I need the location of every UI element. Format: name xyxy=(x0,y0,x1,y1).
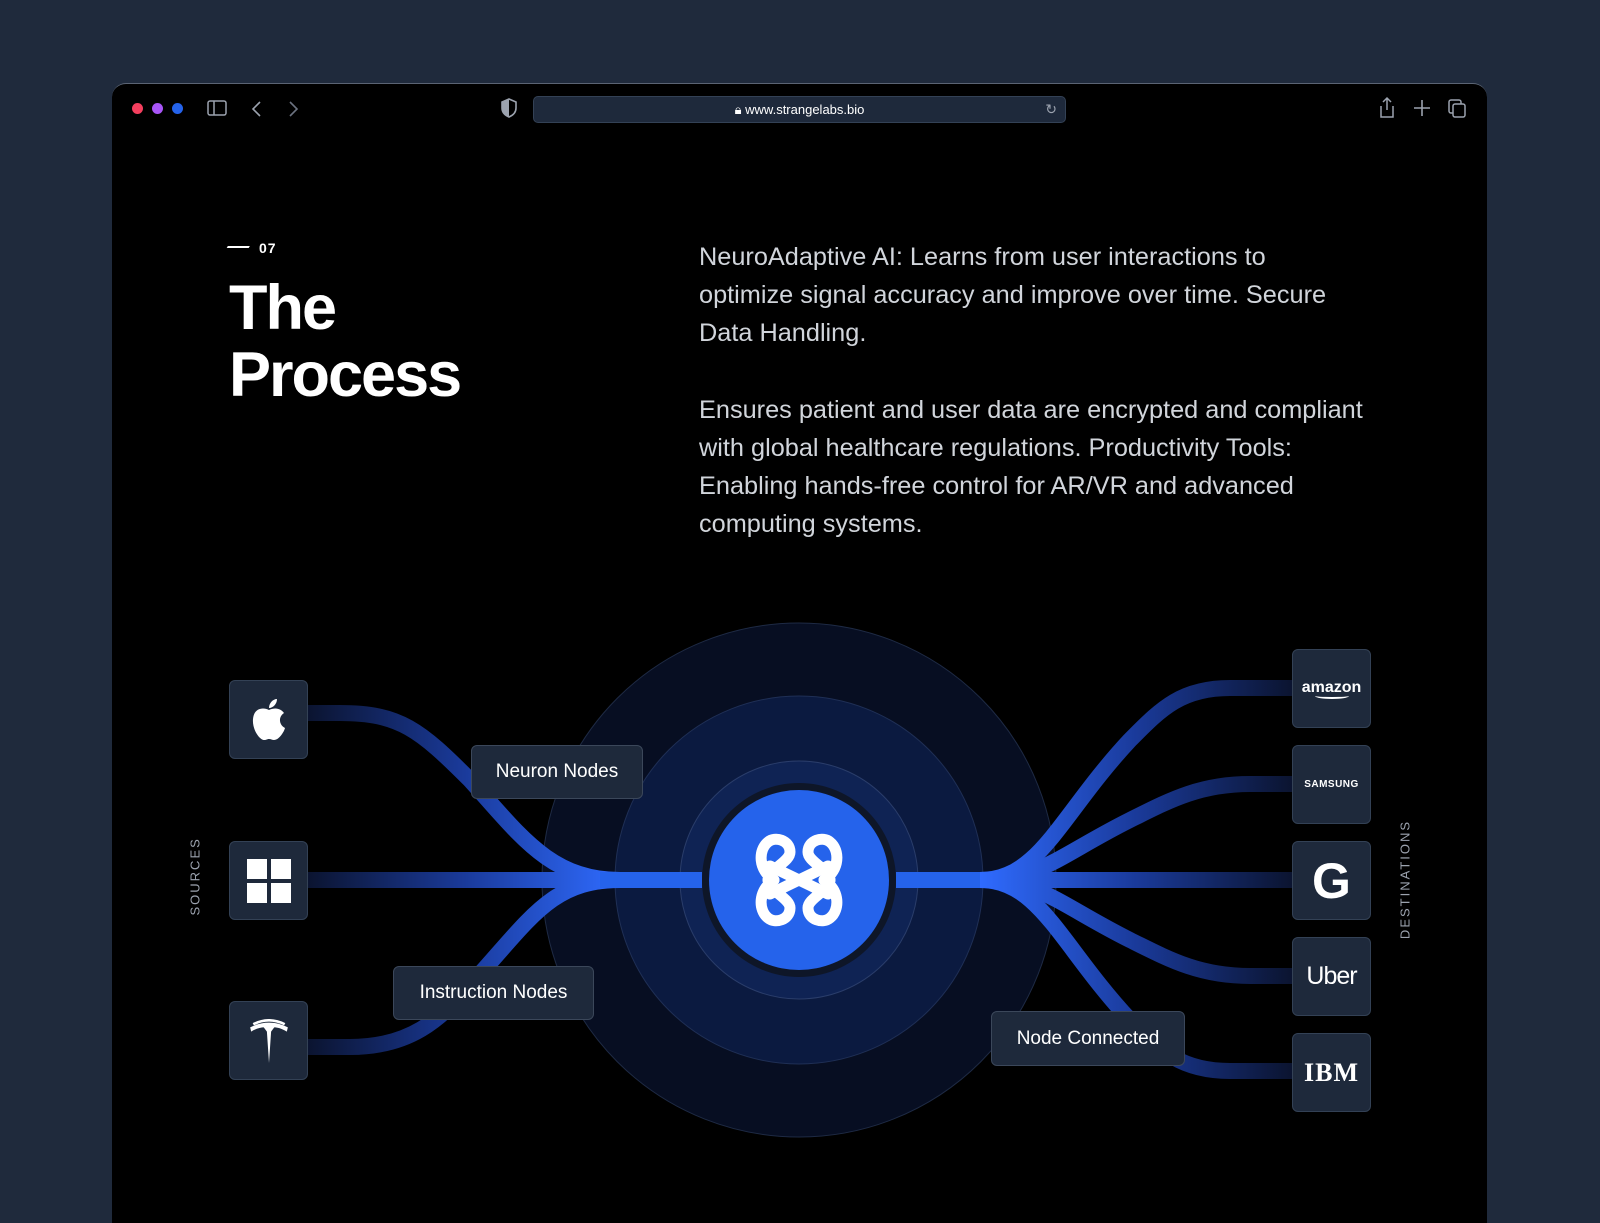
nav icons xyxy=(207,100,298,117)
url bar: 🔒︎ www.strangelabs.bio xyxy=(735,102,864,116)
source: tesla xyxy=(229,1001,308,1080)
paragraph 2: Enabling hands-free control for AR/VR and advanced xyxy=(699,472,1294,500)
section number: 07 xyxy=(259,240,277,256)
destination: samsung xyxy=(1292,745,1371,824)
source: apple xyxy=(229,680,308,759)
paragraph 2: computing systems. xyxy=(699,510,923,538)
section number xyxy=(226,240,277,256)
label: neuron nodes: Neuron Nodes xyxy=(496,761,618,782)
destination: uber xyxy=(1292,937,1371,1016)
circles xyxy=(542,623,1056,1137)
title: The xyxy=(229,273,335,343)
paragraph 1: Data Handling. xyxy=(699,319,866,347)
destination: amazon: amazon xyxy=(1302,678,1361,696)
destination: google xyxy=(1292,841,1371,920)
center logo xyxy=(709,790,889,970)
url bar xyxy=(533,96,1066,123)
label: instruction nodes xyxy=(393,966,594,1020)
center bars xyxy=(600,872,986,888)
paragraph 1: optimize signal accuracy and improve over time. Secure xyxy=(699,281,1326,309)
destination lines xyxy=(980,688,1292,1071)
destination: ibm: IBM xyxy=(1304,1058,1359,1086)
label: destinations: DESTINATIONS xyxy=(1398,820,1412,939)
window dots xyxy=(132,103,183,114)
label: sources: SOURCES xyxy=(188,837,202,916)
label: instruction nodes: Instruction Nodes xyxy=(420,982,567,1003)
label: node connected xyxy=(991,1011,1185,1066)
destination: google: G xyxy=(1312,852,1351,908)
destination: ibm xyxy=(1292,1033,1371,1112)
toolbar xyxy=(132,96,1466,123)
destination: uber: Uber xyxy=(1306,962,1357,990)
label: node connected: Node Connected xyxy=(1017,1028,1159,1048)
url bar: ↻ xyxy=(1045,101,1057,117)
paragraph 1: NeuroAdaptive AI: Learns from user interactions to xyxy=(699,243,1266,271)
paragraph 2 xyxy=(699,396,1363,538)
right icons xyxy=(1380,97,1466,118)
destination: samsung: SAMSUNG xyxy=(1304,779,1359,790)
label: neuron nodes xyxy=(471,745,643,799)
source: windows xyxy=(229,841,308,920)
title xyxy=(229,273,460,410)
paragraph 2: Ensures patient and user data are encrypted and compliant xyxy=(699,396,1363,424)
paragraph 1 xyxy=(699,243,1326,347)
title: Process xyxy=(229,340,460,410)
source lines xyxy=(308,713,620,1047)
destination: amazon xyxy=(1292,649,1371,728)
shield icon xyxy=(501,98,517,118)
paragraph 2: with global healthcare regulations. Productivity Tools: xyxy=(699,434,1292,462)
